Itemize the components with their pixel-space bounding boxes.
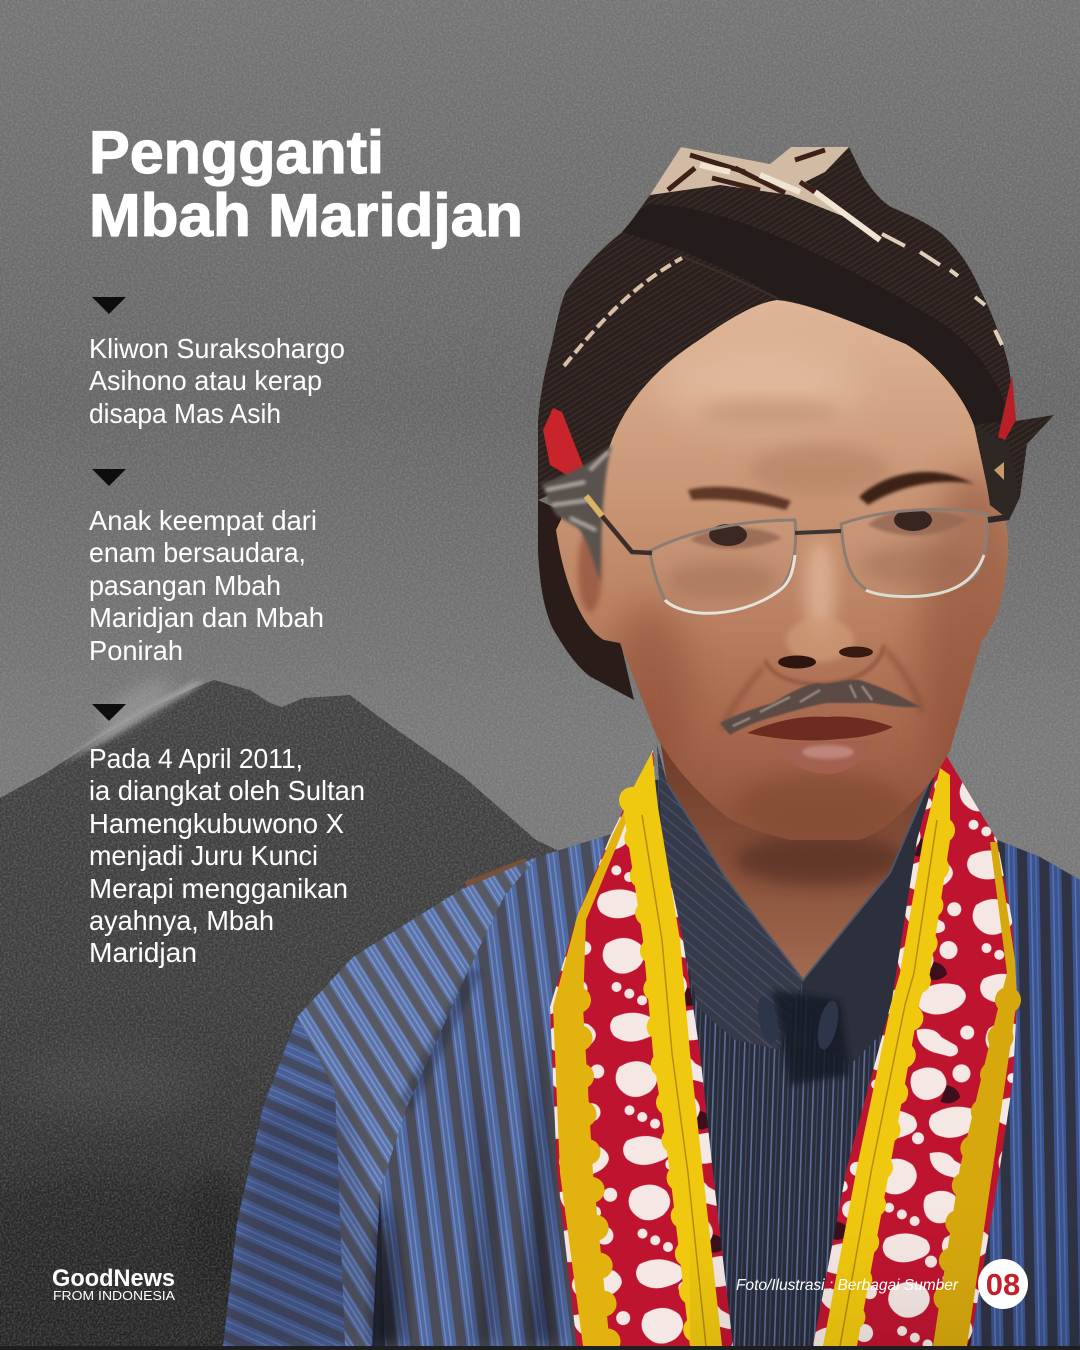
moustache: [720, 680, 920, 735]
photo credit: Foto/Ilustrasi : Berbagai Sumber: [736, 1277, 959, 1294]
shirt front: centre panel: [650, 780, 945, 1346]
text block: family: pasangan Mbah: [89, 570, 281, 601]
text block: name: Asihono atau kerap: [89, 365, 322, 396]
text block: appointment: menjadi Juru Kunci: [89, 840, 318, 871]
nose: [765, 618, 884, 684]
headwrap back flap: [538, 500, 634, 700]
text block: family: Ponirah: [89, 635, 183, 666]
text block: family: [89, 505, 324, 666]
bottom edge strip: [0, 1346, 1080, 1350]
mountain: Merapi silhouette: [0, 671, 600, 1350]
text block: appointment: [89, 743, 365, 968]
text block: appointment: Hamengkubuwono X: [89, 808, 344, 839]
shirt: blue striped lurik: [223, 790, 1080, 1346]
title: [89, 119, 523, 249]
text block: family: enam bersaudara,: [89, 537, 306, 568]
text block: family: Anak keempat dari: [89, 505, 317, 536]
text block: family: Maridjan dan Mbah: [89, 602, 324, 633]
page number badge: 08: [986, 1267, 1020, 1302]
batik top knot: [650, 147, 860, 222]
text block: appointment: ia diangkat oleh Sultan: [89, 775, 365, 806]
logo: GoodNews from Indonesia: GoodNews: [52, 1265, 175, 1292]
text block: appointment: ayahnya, Mbah: [89, 905, 274, 936]
title: Mbah Maridjan: [89, 182, 523, 249]
eyes and eyebrows: [688, 472, 974, 549]
neck: [660, 740, 950, 980]
marker triangle 1: [92, 297, 126, 314]
grey hair: [541, 445, 612, 582]
marker triangle 2: [92, 469, 126, 486]
text block: appointment: Maridjan: [89, 937, 197, 968]
title: Pengganti: [89, 119, 384, 186]
red fabric: [543, 408, 584, 478]
text block: appointment: Pada 4 April 2011,: [89, 743, 303, 774]
text block: name: [89, 333, 345, 429]
text block: appointment: Merapi mengganikan: [89, 873, 348, 904]
right scarf: red batik with yellow trim: [813, 750, 1017, 1346]
lower shading: [690, 1200, 1080, 1346]
marker triangle 3: [92, 704, 126, 721]
face: forehead, cheeks, ears: [556, 300, 1030, 840]
eyeglasses: [586, 496, 1009, 613]
collar: [657, 745, 938, 1085]
text block: name: disapa Mas Asih: [89, 398, 281, 429]
page number badge: [978, 1259, 1028, 1309]
batik trim dashes: [882, 234, 1002, 345]
logo: GoodNews from Indonesia: FROM INDONESIA: [53, 1289, 176, 1303]
left scarf: red batik with yellow trim: [550, 750, 733, 1346]
text block: name: Kliwon Suraksohargo: [89, 333, 345, 364]
headwrap: blangkon: [538, 147, 1054, 582]
lips: [747, 717, 893, 774]
shoulder trim: [464, 858, 530, 892]
portrait: man in blangkon and batik scarf: [223, 147, 1080, 1346]
